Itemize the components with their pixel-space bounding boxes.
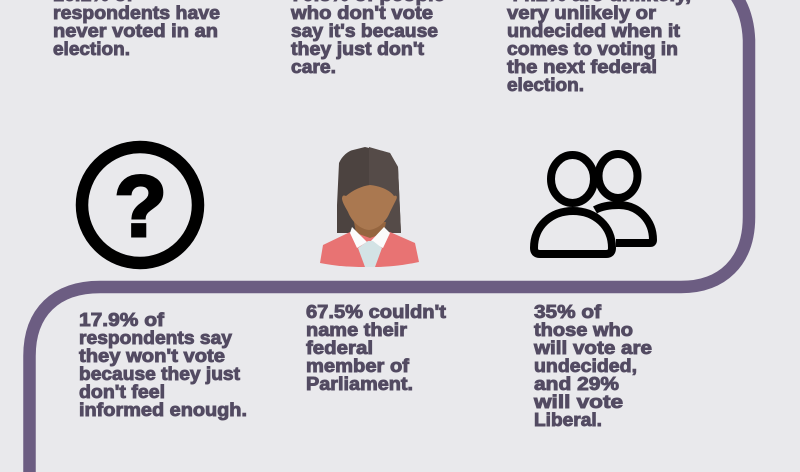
text: not informed: respondents say <box>79 328 232 348</box>
text: undecided and Liberal: and 29% <box>534 374 619 394</box>
text: never voted <box>53 0 220 59</box>
text: unlikely to vote: election. <box>507 75 584 95</box>
text: undecided and Liberal: will vote <box>533 392 623 412</box>
icon: question mark <box>82 147 198 263</box>
text: unlikely to vote: undecided when it <box>507 21 680 41</box>
text: unlikely to vote <box>507 0 691 95</box>
text: undecided and Liberal: 35% of <box>534 302 602 322</box>
text: not informed <box>79 310 247 420</box>
text: don't care: who don't vote <box>290 3 433 23</box>
text: don't care: care. <box>291 57 336 77</box>
text: member of Parliament: 67.5% couldn't <box>306 302 446 322</box>
text: unlikely to vote: comes to voting in <box>507 39 678 59</box>
text: not informed: they won't vote <box>79 346 225 366</box>
text: unlikely to vote: the next federal <box>507 57 657 77</box>
icon: question mark: ? <box>114 159 167 255</box>
text: undecided and Liberal: those who <box>534 320 633 340</box>
text: member of Parliament <box>306 302 446 394</box>
icon: two people <box>534 154 653 254</box>
text: never voted: never voted in an <box>53 21 218 41</box>
text: undecided and Liberal: will vote are <box>533 338 652 358</box>
text: unlikely to vote: very unlikely or <box>507 3 656 23</box>
text: not informed: informed enough. <box>79 400 247 420</box>
icon: woman avatar <box>320 147 419 267</box>
text: not informed: 17.9% of <box>79 310 165 330</box>
text: undecided and Liberal: Liberal. <box>534 410 602 430</box>
text: member of Parliament: federal <box>306 338 373 358</box>
text: undecided and Liberal: undecided, <box>534 356 637 376</box>
text: don't care: say it's because <box>291 21 438 41</box>
text: don't care: they just don't <box>291 39 424 59</box>
text: never voted: respondents have <box>53 3 220 23</box>
text: member of Parliament: member of <box>306 356 410 376</box>
text: not informed: don't feel <box>79 382 165 402</box>
text: member of Parliament: name their <box>306 320 407 340</box>
text: undecided and Liberal <box>533 302 652 430</box>
text: member of Parliament: Parliament. <box>306 374 413 394</box>
text: don't care <box>290 0 445 77</box>
text: not informed: because they just <box>79 364 240 384</box>
text: never voted: election. <box>53 39 130 59</box>
